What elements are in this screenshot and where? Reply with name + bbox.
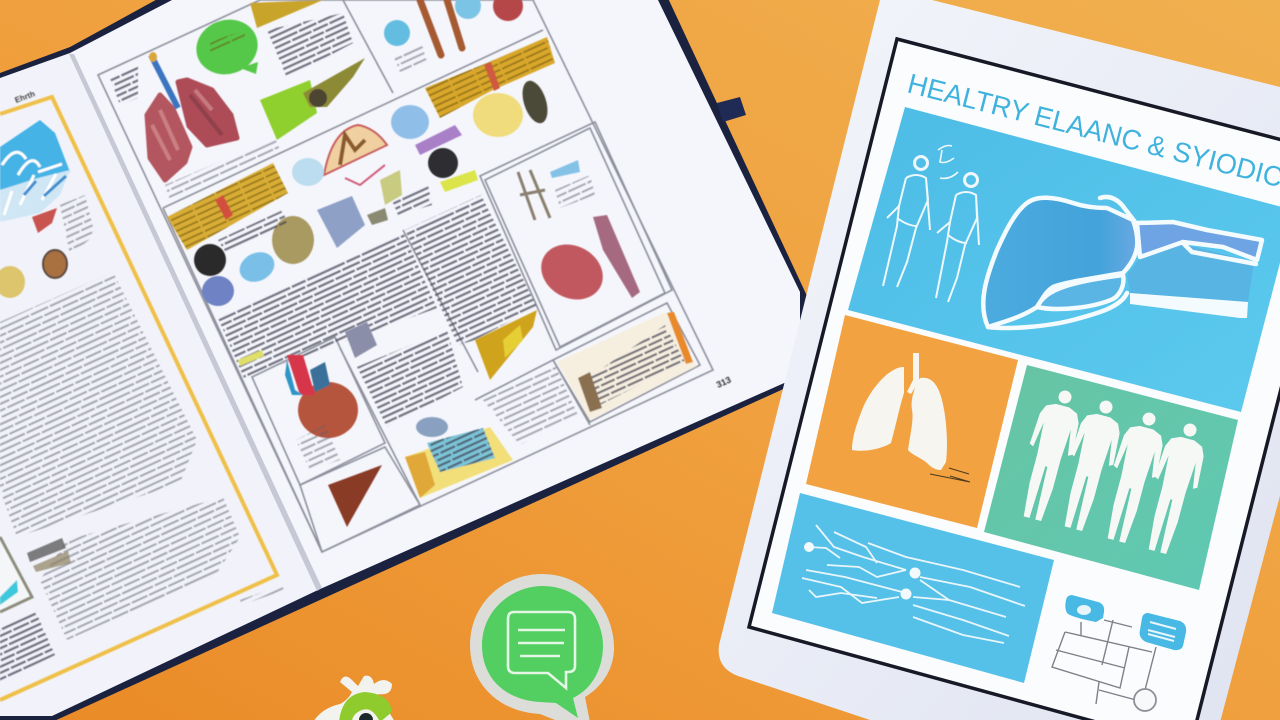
tablet xyxy=(719,0,1280,720)
chapter label: Ehrth xyxy=(14,89,36,105)
white lower strip xyxy=(1130,293,1248,318)
lungs caption xyxy=(930,468,970,482)
nerve nodes xyxy=(804,542,920,600)
person 3 xyxy=(1095,407,1172,546)
upper periwinkle band xyxy=(1137,222,1262,260)
anatomy dome xyxy=(324,125,387,185)
central text column right xyxy=(405,195,537,345)
purple strip xyxy=(415,125,462,155)
legs figure xyxy=(420,0,462,55)
lungs icon xyxy=(852,353,947,470)
lung caption xyxy=(110,65,138,105)
lung lower caption xyxy=(165,138,280,200)
panel frames xyxy=(98,0,713,552)
connector lines xyxy=(1052,620,1156,704)
lower-right pale band xyxy=(1127,244,1254,302)
right page content xyxy=(98,0,733,552)
patterned strip xyxy=(593,215,640,298)
black mineral xyxy=(194,244,226,276)
outlined figures xyxy=(883,146,979,302)
left page xyxy=(0,53,318,716)
small clay figurine xyxy=(313,676,395,720)
blue diagram xyxy=(317,196,365,248)
panel: orange lungs xyxy=(806,315,1018,528)
main lobe xyxy=(983,198,1137,327)
bubble with text lines xyxy=(1140,613,1186,650)
yellow highlight caption xyxy=(238,350,264,366)
lower text column xyxy=(40,497,240,640)
lower-left text xyxy=(0,610,55,683)
lower lobe xyxy=(1037,275,1123,309)
lung illustration xyxy=(147,52,237,180)
outer lower contour xyxy=(988,293,1127,328)
yellow organ xyxy=(0,266,25,298)
person 2 xyxy=(1052,395,1129,534)
indigo gem xyxy=(202,276,234,306)
green arc xyxy=(339,692,392,720)
yellow liver xyxy=(475,310,537,380)
panel: teal figures xyxy=(984,365,1238,590)
cyan inset label xyxy=(0,580,18,605)
central text lower xyxy=(357,330,463,427)
tan manuscript panel xyxy=(557,312,697,420)
red heart thumbnail xyxy=(493,0,523,21)
yellow circle note xyxy=(473,93,523,137)
yellow top banner xyxy=(250,0,323,28)
dark centre xyxy=(359,713,373,720)
page footer xyxy=(240,585,284,605)
left page content xyxy=(0,89,284,700)
sticker border xyxy=(470,574,614,720)
bubble with icon xyxy=(1065,595,1104,622)
blue label xyxy=(550,160,580,178)
small grid xyxy=(345,322,377,358)
upper text column xyxy=(0,272,197,537)
brain illustration xyxy=(532,234,612,310)
hook xyxy=(1100,197,1135,222)
yellow and blue gridded panel xyxy=(405,417,513,498)
blue circle icon xyxy=(384,20,410,46)
heart illustration xyxy=(285,355,358,438)
small caption xyxy=(393,45,427,72)
right page xyxy=(70,0,800,590)
caption strip xyxy=(218,210,287,252)
blue gem xyxy=(235,247,279,287)
pale blue organ xyxy=(391,105,429,139)
yellow frame xyxy=(0,97,277,700)
dark caption xyxy=(392,185,432,215)
text block beside bubble xyxy=(267,13,353,78)
heart caption scribbles xyxy=(296,425,340,470)
gutter xyxy=(69,54,322,591)
yellow highlight xyxy=(440,170,478,192)
blue illustration xyxy=(0,120,70,222)
yellow mid banner xyxy=(167,163,288,250)
brown pendant organ xyxy=(43,250,67,278)
mosaic illustration xyxy=(272,216,314,264)
black organ xyxy=(428,148,458,178)
black scribble specimen xyxy=(518,78,552,126)
flow diagram xyxy=(1052,595,1186,711)
scribbled handwriting xyxy=(483,365,578,445)
right yellow banner xyxy=(425,37,555,118)
white base xyxy=(313,676,395,720)
green flag with olive organ xyxy=(260,58,365,140)
framed inset xyxy=(0,537,32,612)
yellow-green note xyxy=(380,170,402,205)
message icon xyxy=(508,612,575,688)
circle node xyxy=(1134,689,1156,711)
person 4 xyxy=(1136,418,1213,557)
green face xyxy=(482,586,603,718)
blue fan xyxy=(292,158,324,186)
page number: 313 xyxy=(715,375,733,390)
panel: liver and figures xyxy=(848,107,1280,412)
person 1 xyxy=(1011,385,1088,524)
small caption chips xyxy=(27,538,66,562)
green speech bubble sticker xyxy=(470,574,614,720)
screen xyxy=(749,39,1280,720)
blue blob xyxy=(455,0,481,19)
organ captions xyxy=(60,195,95,255)
bookmark ribbon xyxy=(717,97,746,122)
open book xyxy=(0,0,807,720)
band junction contour xyxy=(1183,243,1256,264)
panel: blue nerve network xyxy=(772,493,1054,683)
central text column left xyxy=(218,232,437,378)
nerve lines xyxy=(802,525,1025,643)
book cover edge xyxy=(0,0,807,720)
green speech bubble xyxy=(189,12,265,82)
dark brown liver xyxy=(328,465,382,527)
large liver organ xyxy=(983,197,1262,328)
vessel diagram xyxy=(518,170,550,220)
caption lines xyxy=(555,175,595,208)
tablet body xyxy=(719,0,1280,720)
red organ xyxy=(32,208,57,233)
